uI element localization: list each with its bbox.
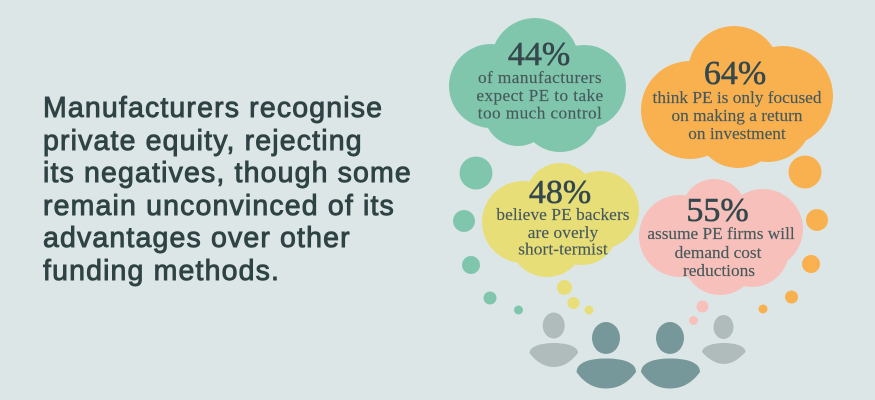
panel: yellow cloud 48% [482, 163, 639, 277]
stat: 48%: 48% [529, 174, 591, 211]
description: manufacturers: too much control [478, 104, 602, 122]
icon: person inner left [576, 322, 636, 388]
description: return on investment: think PE is only focused [653, 88, 822, 107]
description: cost reductions: demand cost [675, 243, 762, 262]
heading text: Manufacturers recognise [43, 92, 383, 124]
icon: person far right [702, 315, 746, 364]
thought bubbles: yellow [557, 280, 594, 314]
thought bubbles: orange [758, 156, 828, 314]
icon: person inner right [641, 322, 700, 388]
stat: 55%: 55% [686, 192, 749, 229]
thought bubbles: pink [689, 300, 708, 325]
description: manufacturers: expect PE to take [476, 86, 604, 105]
description: cost reductions: assume PE firms will [647, 224, 795, 243]
description: return on investment: on making a return [671, 106, 803, 125]
heading text: private equity, rejecting [43, 125, 363, 157]
description: return on investment: on investment [688, 124, 786, 143]
heading text: remain unconvinced of its [43, 190, 395, 222]
heading text [42, 92, 412, 287]
thought bubbles: green [453, 156, 523, 314]
description: cost reductions: reductions [683, 261, 755, 280]
icon: person far left [530, 312, 578, 367]
heading text: its negatives, though some [43, 157, 412, 189]
description: short-termist: are overly [528, 223, 599, 242]
description: short-termist: short-termist [518, 240, 608, 258]
panel: pink cloud 55% [639, 179, 803, 295]
stat: 64%: 64% [704, 55, 766, 92]
stat: 44%: 44% [508, 36, 570, 73]
panel: orange cloud 64% [641, 26, 833, 168]
panel: green cloud 44% [449, 18, 626, 152]
heading text: funding methods. [43, 255, 280, 287]
description: manufacturers: of manufacturers [478, 68, 602, 87]
description: short-termist: believe PE backers [496, 205, 630, 224]
heading text: advantages over other [43, 222, 351, 254]
